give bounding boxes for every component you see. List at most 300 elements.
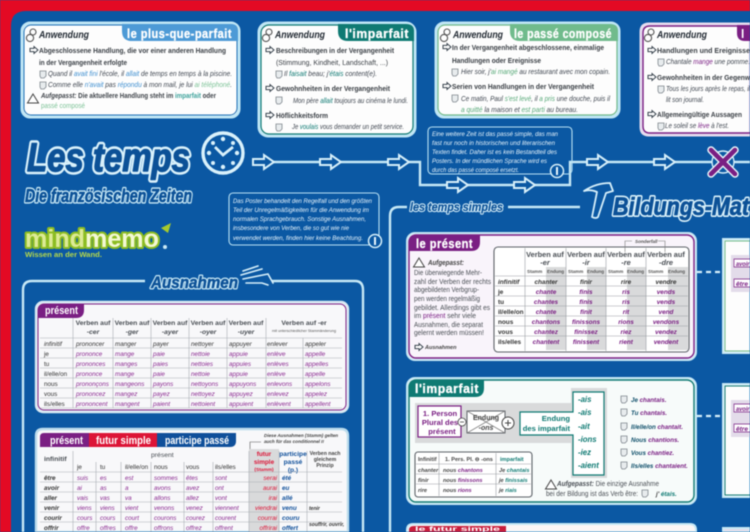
formation table: vous [498, 329, 513, 336]
note: Aufgepasst: Die überwiegende Mehr- [414, 268, 483, 277]
table header: passé [284, 459, 303, 466]
note: future stems [250, 433, 338, 450]
box: Endung des imparfait [520, 392, 604, 475]
small table: nous chantons [443, 468, 483, 474]
note: Aufgepasst: gebildet. Allerdings gibt es [414, 303, 490, 312]
table rows: appuient [229, 401, 253, 408]
formation table: chantent [533, 339, 560, 346]
table header: -cer [87, 329, 100, 336]
table header: Verben auf [115, 320, 150, 327]
text: imparfait rules: Gewohnheiten in der Vergangenheit [276, 84, 390, 93]
table header: Verben auf [76, 320, 111, 327]
table rows: courent [215, 515, 236, 522]
formation table: Endung [547, 269, 564, 274]
heading: Anwendung: Anwendung [452, 29, 503, 41]
table rows: offrez [186, 525, 203, 532]
table rows: prononcer [75, 341, 105, 348]
formation table: nous [498, 319, 514, 326]
table rows: irai [269, 495, 278, 502]
examples: Il/elle/on chantait. [631, 424, 683, 431]
panel: l'imparfait formation [407, 378, 696, 504]
sonderfall bracket: Sonderfall [635, 239, 658, 244]
formation table: Stamm [568, 269, 583, 274]
side panel: présent auxiliary: être [736, 281, 748, 288]
text: présent rules [648, 46, 750, 130]
table header: futur [257, 451, 272, 458]
info box: passé simple: fast nur noch in historischen und literarischen [432, 140, 555, 147]
text: imparfait rules [266, 46, 408, 131]
formation table: Endung [668, 269, 685, 274]
table rows: je [43, 351, 49, 358]
table rows: viens [77, 505, 93, 512]
formula band [415, 388, 607, 478]
formation table: Verben auf [607, 250, 645, 259]
table header: gleichem [314, 457, 337, 463]
formation table: rit [623, 309, 630, 316]
table rows: été [282, 475, 292, 482]
table header: il/elle/on [125, 464, 149, 471]
formation table: vendent [654, 339, 679, 346]
tab: le présent: l [741, 27, 744, 41]
formation table: Stamm [608, 269, 623, 274]
table rows: suis [77, 475, 89, 482]
small table: je finissais [498, 478, 528, 484]
table header: infinitif [44, 456, 67, 463]
info box: scope of poster: Teil der Unregelmäßigkeiten für die Anwendung im [233, 207, 369, 214]
formation table: rient [619, 339, 634, 346]
table header: -ger [126, 329, 139, 336]
note: Aufgepasst: zahl der Verben der rechts [414, 277, 491, 286]
table rows: vais [77, 495, 89, 502]
text: imparfait rules: Beschreibungen in der Vergangenheit [276, 46, 394, 55]
text: plus-que-parfait rules: Abgeschlossene Handlung, die vor einer anderen Handlung [39, 46, 226, 55]
table rows: nous [44, 381, 58, 388]
small table: chanter [418, 468, 439, 474]
info box: scope of poster: verwendet werden, finden hier keine Beachtung. [233, 235, 363, 242]
formation table: vend [659, 309, 675, 316]
table rows: enlève [267, 351, 286, 358]
section frame: Ausnahmen [23, 266, 363, 532]
table rows: court [125, 515, 139, 522]
table rows: mangeons [115, 381, 145, 388]
box: Endung des imparfait: -ais [578, 408, 592, 417]
formation table: chante [536, 289, 557, 296]
table rows: venir [44, 505, 60, 512]
table rows: appelles [305, 361, 329, 368]
text: passé composé rules: Serien von Handlungen in der Vergangenheit [452, 82, 594, 91]
text: passé composé rules: a quitté la maison et est parti au bureau. [461, 105, 578, 114]
formation table: chante [536, 309, 557, 316]
heading: les temps simples: les temps simples [410, 202, 503, 214]
table rows: vas [100, 495, 111, 502]
table header: nous [154, 464, 168, 471]
table rows: offrent [215, 525, 233, 532]
formation table: vends [657, 299, 676, 306]
table rows: enlève [267, 371, 286, 378]
info box: passé simple: Texten findet. Daher ist es kein Bestandteil des [432, 149, 558, 156]
formation table: Verben auf [647, 250, 685, 259]
connector: imparfait to side panel [697, 415, 722, 417]
table header: Verben nach [310, 451, 340, 457]
table header [44, 451, 340, 474]
table rows: ils/elles [44, 401, 65, 408]
table rows: vient [125, 505, 139, 512]
logo: mindmemo: Wissen an der Wand. [25, 252, 102, 259]
examples: Ils/elles chantaient. [631, 463, 688, 470]
formation table: finis [579, 289, 593, 296]
formation table: chantons [532, 319, 561, 326]
table rows: offrirai [260, 525, 278, 532]
note: future stems: Diese Ausnahmen (Stamm) gelten [264, 433, 338, 438]
table rows: appeler [305, 341, 327, 348]
formation table: chantez [534, 329, 559, 336]
formation table: chanter [534, 279, 558, 286]
table header: ils/elles [215, 464, 236, 471]
side panel: imparfait auxiliary: être [736, 426, 748, 433]
note: Aufgepasst: pen werden regelmäßig [414, 294, 480, 303]
text: plus-que-parfait rules: Aufgepasst: Die aktuellere Handlung steht im imparfait oder [40, 93, 216, 100]
box: Endung des imparfait: -ait [578, 422, 590, 431]
examples: Nous chantions. [631, 437, 679, 444]
table header: Verben auf [153, 320, 188, 327]
formation table: vendons [653, 319, 680, 326]
table rows: avez [186, 485, 200, 492]
text: plus-que-parfait rules: passé composé [41, 103, 85, 110]
connector: présent to side panel [697, 271, 722, 273]
tab: présent [40, 433, 89, 447]
box: crossed out ending -ons [458, 411, 505, 433]
formation table: finissez [574, 329, 599, 336]
heading: Anwendung [440, 29, 503, 42]
table rows: vous [44, 391, 57, 398]
logo: mindmemo: mindmemo [25, 225, 159, 253]
table rows: prononce [75, 371, 103, 378]
formation table: finir [580, 279, 593, 286]
table header: simple [254, 459, 275, 466]
table rows: appuies [229, 361, 252, 368]
formation table: Verben auf [567, 250, 605, 259]
tab: présent: présent [45, 305, 78, 317]
note: future stems: auch für das conditionnel I! [264, 439, 324, 444]
text: plus-que-parfait rules: Quand il avait fini l'école, il allait de temps en temps à la piscine. [48, 69, 232, 78]
table rows: prononcez [75, 391, 106, 398]
info box: passé simple: Posters. In der mündlichen Sprache wird es [432, 158, 548, 165]
text: passé composé rules: In der Vergangenheit abgeschlossene, einmalige [452, 43, 604, 52]
table rows: avons [154, 485, 172, 492]
heading: Anwendung [262, 29, 325, 42]
table rows: as [100, 485, 108, 492]
table rows: courir [44, 515, 62, 522]
table rows: enlever [267, 341, 289, 348]
note: Aufgepasst: im présent sehr viele [414, 311, 476, 320]
tab: présent: présent [50, 435, 83, 447]
examples: Je chantais. [631, 397, 667, 404]
text: présent rules: Le soleil se lève à l'est. [665, 121, 729, 130]
table rows: manger [115, 341, 137, 348]
table header: -uyer [238, 329, 255, 336]
table rows: enlevez [267, 391, 290, 398]
table rows: mange [115, 371, 135, 378]
table rows: enlevons [267, 381, 293, 388]
table header: Verben auf [191, 320, 226, 327]
table rows: cours [100, 515, 116, 522]
panel: imparfait usage [259, 23, 415, 136]
formation table: -dre [659, 258, 673, 267]
title: Les temps: Les temps [27, 136, 190, 180]
small table: je riais [498, 488, 517, 494]
small table: Infinitif [418, 457, 437, 463]
table grid [40, 451, 342, 532]
table rows: infinitif [44, 341, 63, 348]
table rows: prononces [75, 361, 106, 368]
info box: passé simple: Eine weitere Zeit ist das passé simple, das man [432, 131, 558, 138]
info box: passé simple: durch das passé composé ersetzt. [432, 167, 519, 174]
table rows: es [100, 475, 108, 482]
examples: Vous chantiez. [631, 450, 674, 457]
table rows: nettoient [191, 401, 215, 408]
table header: -ayer [162, 329, 178, 336]
box: Endung des imparfait: -iez [578, 448, 591, 457]
box: 1. Person Plural des présent [418, 406, 461, 437]
table header: Verben auf -er [281, 320, 327, 327]
tab: le passé composé: le passé composé [514, 26, 612, 41]
table header: (Stamm) [254, 467, 274, 473]
table rows: nettoyer [191, 341, 215, 348]
table rows: va [125, 495, 132, 502]
table header: mit unterschiedlicher Stammänderung [272, 329, 336, 333]
text: imparfait rules: Je voulais vous demander un petit service. [291, 122, 404, 131]
panel: le futur simple formation [407, 524, 696, 532]
table rows: viendrai [255, 505, 278, 512]
tab: l'imparfait: l'imparfait [415, 381, 479, 396]
heading: Anwendung [26, 29, 89, 42]
box: Endung des imparfait: -ais [578, 395, 592, 404]
sonderfall bracket [625, 239, 665, 252]
table rows: courez [186, 515, 206, 522]
table rows: venez [186, 505, 204, 512]
formation table: Stamm [527, 269, 542, 274]
panel: passé composé usage [436, 23, 619, 117]
subtitle: Die französischen Zeiten: Die französischen Zeiten [25, 186, 192, 206]
box: Endung des imparfait: -ions [578, 435, 597, 444]
table rows: appelons [305, 381, 331, 388]
examples [621, 396, 688, 470]
table rows: appuyez [229, 391, 254, 398]
tab: futur simple: futur simple [96, 435, 151, 447]
section line: les temps simples [390, 183, 750, 532]
examples: Tu chantais. [631, 410, 667, 417]
table rows: viennent [215, 505, 239, 512]
table rows: payez [152, 391, 171, 398]
table rows: mangez [115, 391, 138, 398]
table rows: ont [215, 485, 224, 492]
text: plus-que-parfait rules: Comme elle n'avait pas répondu à mon mail, je lui ai téléphoné. [48, 80, 232, 89]
icon: hammer [584, 183, 613, 218]
formation table: rire [621, 279, 632, 286]
box: crossed out ending -ons: Endung [473, 415, 499, 422]
table rows: sommes [154, 475, 179, 482]
heading: Anwendung: Anwendung [38, 29, 89, 41]
table rows: courrai [258, 515, 278, 522]
table rows: aller [44, 495, 58, 502]
text: passé composé rules: Handlungen oder Ereignisse [452, 56, 541, 65]
table header [76, 320, 336, 336]
box: 1. Person Plural des présent: présent [428, 427, 456, 436]
table rows: allez [186, 495, 200, 502]
info box: passé simple [428, 127, 572, 178]
table rows: manges [115, 361, 138, 368]
table rows: êtes [186, 475, 199, 482]
table rows: appellent [305, 401, 331, 408]
note: Aufgepasst: gelernt werden müssen! [414, 328, 484, 337]
table rows: il/elle/on [44, 371, 68, 378]
formation table: Verben auf [526, 250, 564, 259]
side panel: présent auxiliary [723, 239, 750, 353]
table rows: tenir [309, 506, 321, 512]
formation table: tu [498, 299, 504, 306]
small table: 1. Pers. Pl. ⊖ -ons [445, 457, 493, 463]
formation table: finis [579, 299, 593, 306]
small table [415, 452, 532, 497]
formation table: vends [657, 289, 676, 296]
table rows: couru [282, 515, 300, 522]
table rows: est [125, 475, 134, 482]
small table: imparfait [500, 457, 524, 463]
table header: (p.) [288, 467, 298, 474]
heading: Ausnahmen: Ausnahmen [150, 273, 238, 292]
note: Aufgepasst: abgebildeten Verbgrup- [414, 285, 480, 294]
small table: rire [418, 488, 427, 494]
formation table: vendre [656, 279, 677, 286]
formation table: rions [618, 319, 634, 326]
table rows: nettoyez [191, 391, 216, 398]
panel: le présent formation [407, 233, 696, 360]
formation table: finissons [572, 319, 600, 326]
icon: pointing hand [241, 266, 273, 285]
tab: le plus-que-parfait: le plus-que-parfait [127, 26, 232, 41]
table header: -oyer [200, 329, 217, 336]
formation table: ris [622, 299, 630, 306]
icon: plus [502, 417, 514, 429]
text: passé composé rules: Hier soir, j'ai mangé au restaurant avec mon copain. [461, 67, 610, 76]
formation table: -ir [582, 258, 591, 267]
heading: les temps simples: les temps simples [410, 202, 503, 214]
table rows: appuyons [229, 381, 257, 388]
table rows: venons [154, 505, 175, 512]
text: plus-que-parfait rules [28, 46, 232, 110]
formation table: finissent [573, 339, 600, 346]
table rows: serai [263, 475, 278, 482]
timeline arrows [253, 150, 750, 192]
table rows [43, 341, 331, 408]
table rows: appuyer [229, 341, 253, 348]
table rows: prononcent [75, 401, 108, 408]
text: imparfait rules: (Stimmung, Kindheit, Landschaft, ...) [276, 58, 388, 67]
table header: vous [186, 464, 199, 471]
box: Endung des imparfait: -aient [578, 461, 599, 470]
box: Endung des imparfait: des imparfait [523, 424, 570, 433]
text: présent rules: lit son journal. [666, 95, 704, 104]
table rows: offres [100, 525, 117, 532]
table rows: allons [154, 495, 171, 502]
table header: présent [151, 452, 174, 459]
table rows: allé [282, 495, 293, 502]
formation table [494, 239, 689, 352]
note: Aufgepasst être: bei der Bildung ist das Verb être: [546, 491, 638, 498]
note: Aufgepasst être: j' étais. [655, 491, 677, 498]
side panel: imparfait auxiliary [723, 384, 750, 497]
note: Aufgepasst [414, 258, 491, 351]
table rows: tu [44, 361, 50, 368]
table rows: mangent [115, 401, 140, 408]
note: Aufgepasst: Ausnahmen [424, 345, 457, 351]
table rows: prononçons [75, 381, 110, 388]
box: 1. Person Plural des présent: 1. Person [423, 409, 457, 418]
box: Endung des imparfait: Endung [542, 414, 570, 423]
icon: today marker X [711, 150, 735, 174]
table rows: viens [100, 505, 116, 512]
table rows: vont [215, 495, 227, 502]
table rows: eu [282, 485, 290, 492]
formation table: riez [620, 329, 632, 336]
table rows: ai [77, 485, 83, 492]
info box: scope of poster: normalen Sprachgebrauch. Sonstige Ausnahmen, [233, 216, 366, 223]
note: Aufgepasst être [546, 480, 677, 498]
heading: Ausnahmen: Ausnahmen [150, 273, 238, 292]
table rows: aurai [263, 485, 278, 492]
formation table: finit [580, 309, 593, 316]
table rows: cours [77, 515, 93, 522]
note: Aufgepasst: Ausnahmen, die separat [414, 320, 483, 329]
formation table: -re [621, 258, 631, 267]
table rows: nettoie [191, 351, 210, 358]
table rows: nettoie [191, 371, 210, 378]
panel: Ausnahmen irregular verbs table [36, 429, 348, 532]
text: imparfait rules: Höflichkeitsform [276, 111, 328, 120]
table rows: paies [152, 361, 169, 368]
formation table: -er [540, 258, 551, 267]
text: passé composé rules: Ce matin, Paul s'est levé, il a pris une douche, puis il [461, 94, 610, 103]
table rows: nettoies [191, 361, 214, 368]
formation table: il/elle/on [498, 309, 524, 316]
side panel: futur simple [723, 528, 750, 532]
table rows: offrir [44, 525, 59, 532]
small table: nous rions [443, 488, 472, 494]
table rows: courons [154, 515, 177, 522]
table rows: a [125, 485, 129, 492]
table rows: paie [152, 351, 165, 358]
tab: le présent: le présent [416, 236, 473, 251]
small table: finir [418, 478, 429, 484]
table rows: enlèves [267, 361, 290, 368]
note: Aufgepasst: Aufgepasst: [427, 260, 464, 267]
icon: clock [203, 133, 243, 173]
table rows: paient [152, 401, 170, 408]
table header: Verben auf [229, 320, 264, 327]
table rows: mange [115, 351, 135, 358]
info box: scope of poster: Das Poster behandelt den Regelfall und den größten [233, 198, 372, 205]
table rows: appuie [229, 351, 248, 358]
table header: je [76, 464, 82, 471]
table rows: enlèvent [267, 401, 291, 408]
tab: participe passé: participe passé [165, 435, 229, 447]
formation table: ils/elles [498, 339, 522, 346]
table rows: appuie [229, 371, 248, 378]
table rows: payer [152, 341, 170, 348]
table rows: appelle [305, 371, 326, 378]
table rows: offert [282, 525, 299, 532]
heading: Anwendung: Anwendung [274, 29, 325, 41]
